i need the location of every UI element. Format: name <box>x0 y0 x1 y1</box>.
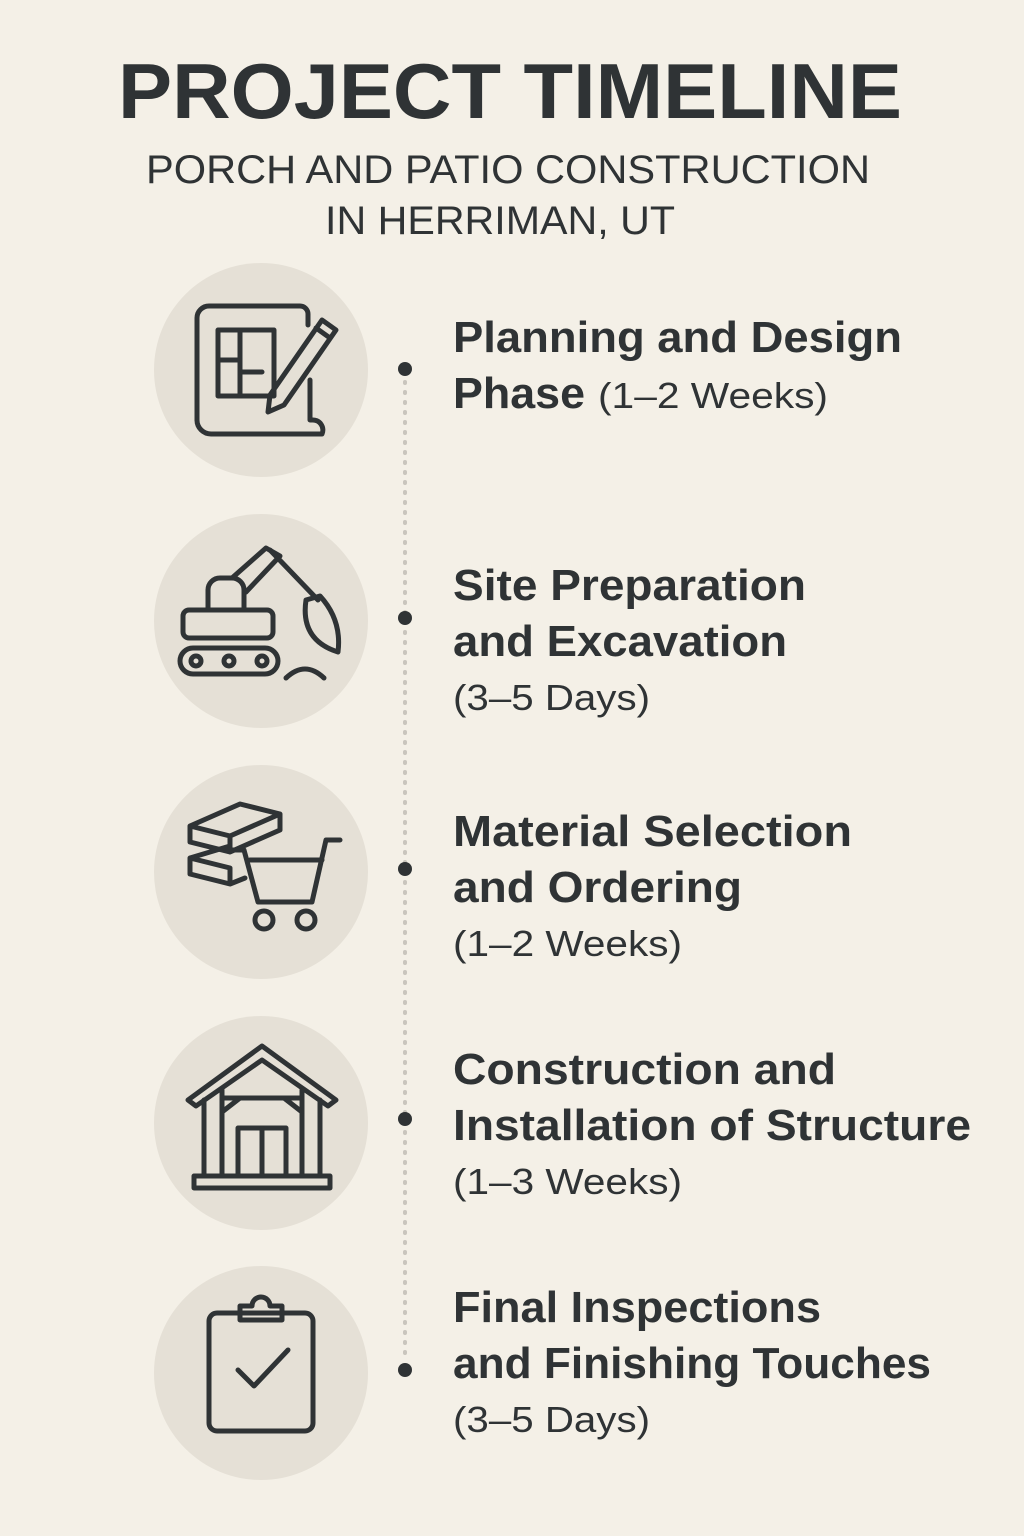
text: step 5: (3–5 Days) <box>453 1399 650 1440</box>
subtitle <box>146 148 870 243</box>
text: step 2: Site Preparation <box>453 561 806 610</box>
icon: blueprint and pencil <box>154 263 368 477</box>
text: step 1: Phase <box>453 369 585 418</box>
text: step 3: and Ordering <box>453 863 742 912</box>
text: step 3: Material Selection <box>453 807 852 856</box>
text: step 4: Installation of Structure <box>453 1101 971 1150</box>
text: step 1: (1–2 Weeks) <box>598 375 828 416</box>
icon: house structure <box>154 1016 368 1230</box>
text: step 2 <box>453 561 806 718</box>
text: step 1 <box>453 313 902 418</box>
text: step 3: (1–2 Weeks) <box>453 923 682 964</box>
icon: clipboard check <box>154 1266 368 1480</box>
title: PROJECT TIMELINE <box>118 47 902 135</box>
timeline line <box>398 362 412 1377</box>
text: step 5: Final Inspections <box>453 1283 821 1332</box>
text: step 5 <box>453 1283 931 1440</box>
text: step 1: Planning and Design <box>453 313 902 362</box>
icon: materials and cart <box>154 765 368 979</box>
text: step 4: Construction and <box>453 1045 836 1094</box>
text: step 4 <box>453 1045 971 1202</box>
text: step 5: and Finishing Touches <box>453 1339 931 1388</box>
text: step 2: and Excavation <box>453 617 787 666</box>
icon: excavator <box>154 514 368 728</box>
text: step 3 <box>453 807 852 964</box>
text: step 4: (1–3 Weeks) <box>453 1161 682 1202</box>
subtitle: PORCH AND PATIO CONSTRUCTION <box>146 148 870 192</box>
subtitle: IN HERRIMAN, UT <box>325 199 675 243</box>
text: step 2: (3–5 Days) <box>453 677 650 718</box>
